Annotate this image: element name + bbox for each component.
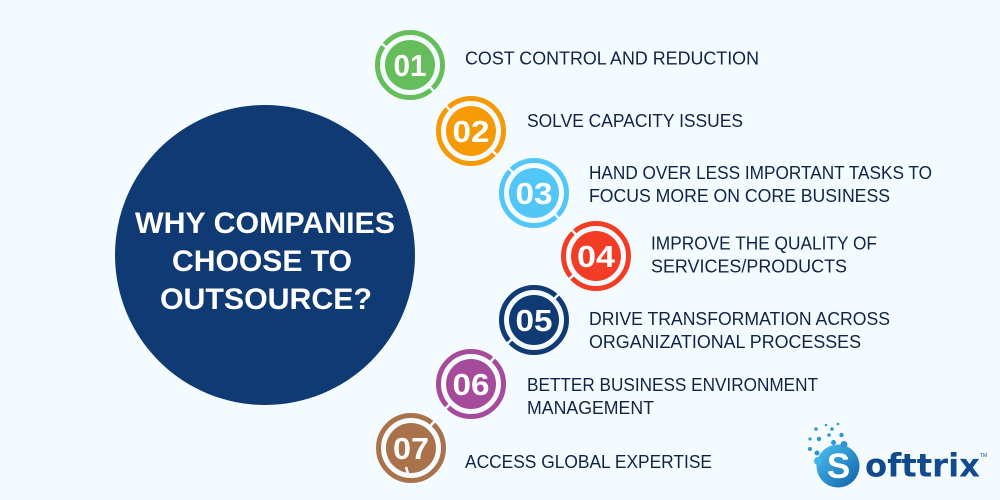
- item 06 badge: 06: [452, 367, 490, 402]
- logo: Softtrix: [808, 423, 987, 488]
- item 01 badge: [378, 32, 442, 98]
- item 01 text: COST CONTROL AND REDUCTION: [465, 48, 759, 68]
- item 07 badge: [378, 416, 444, 480]
- trademark: TM: [980, 453, 987, 459]
- item 04 text: [651, 234, 877, 276]
- heading: WHY COMPANIES: [135, 207, 395, 240]
- item 03 text: HAND OVER LESS IMPORTANT TASKS TO: [589, 163, 932, 183]
- item 04 badge: 04: [577, 239, 616, 274]
- item 03 text: [589, 163, 932, 206]
- item 04 badge: [564, 224, 628, 288]
- icon: logo S ball: [814, 441, 860, 488]
- item 03 badge: 03: [516, 176, 552, 211]
- item 05 text: DRIVE TRANSFORMATION ACROSS: [589, 309, 890, 329]
- heading: OUTSOURCE?: [160, 283, 372, 316]
- item 01 badge: 01: [394, 48, 426, 83]
- item 04 text: IMPROVE THE QUALITY OF: [651, 234, 877, 254]
- item 07 badge: 07: [393, 431, 429, 466]
- item 05 badge: [502, 288, 566, 352]
- item 03 text: FOCUS MORE ON CORE BUSINESS: [589, 186, 890, 206]
- item 06 text: MANAGEMENT: [527, 398, 654, 418]
- heading: [135, 207, 395, 316]
- icon: logo S ball: S: [827, 447, 850, 486]
- icon: logo dots: [808, 423, 844, 456]
- item 02 text: SOLVE CAPACITY ISSUES: [527, 111, 743, 131]
- central circle: title: [115, 105, 415, 405]
- item 07 text: ACCESS GLOBAL EXPERTISE: [465, 452, 712, 472]
- item 06 text: BETTER BUSINESS ENVIRONMENT: [527, 375, 818, 395]
- item 06 text: [527, 375, 818, 418]
- item 05 text: [589, 309, 890, 352]
- item 02 badge: 02: [452, 114, 490, 149]
- item 05 badge: 05: [516, 303, 552, 338]
- item 03 badge: [502, 160, 566, 226]
- logo wordmark: ofttrix: [865, 446, 980, 484]
- heading: CHOOSE TO: [172, 245, 352, 278]
- item 02 badge: [438, 98, 504, 164]
- item 04 text: SERVICES/PRODUCTS: [651, 256, 847, 276]
- item 06 badge: [438, 352, 504, 416]
- item 05 text: ORGANIZATIONAL PROCESSES: [589, 332, 861, 352]
